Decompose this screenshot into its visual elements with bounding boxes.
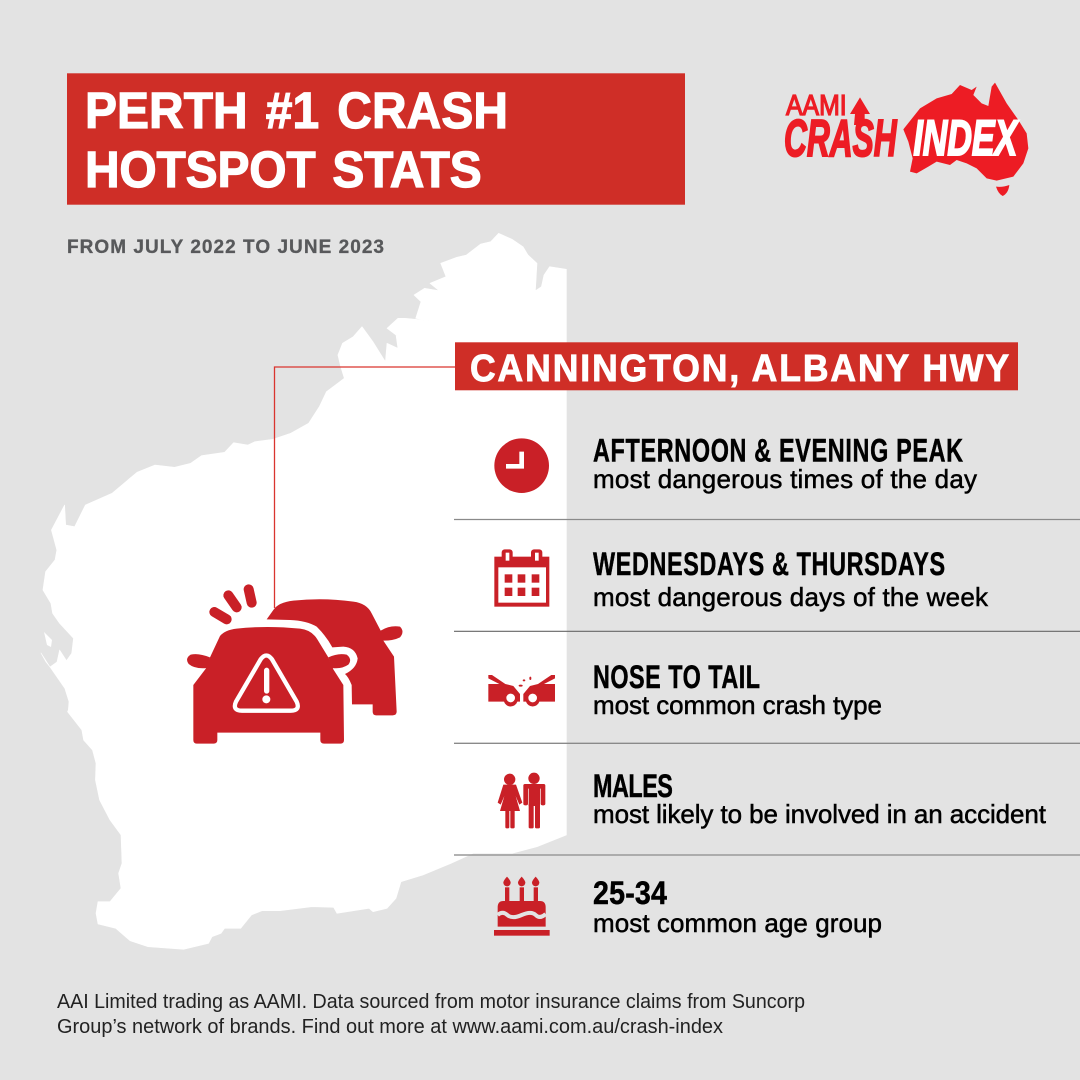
description: gender: most likely to be involved in an accident xyxy=(593,799,1047,829)
icon: birthday cake xyxy=(494,877,550,936)
title banner xyxy=(67,73,685,205)
logo: AAMI Crash Index: AAMI xyxy=(786,90,847,122)
footer source note: Group’s network of brands. Find out more at www.aami.com.au/crash-index xyxy=(57,1015,724,1038)
logo: AAMI Crash Index: INDEX xyxy=(913,110,1019,166)
stat row: gender xyxy=(498,767,1047,829)
title banner: HOTSPOT STATS xyxy=(85,142,482,198)
footer source note xyxy=(57,990,805,1038)
description: days of the week: most dangerous days of the week xyxy=(593,582,989,612)
date range subtitle: FROM JULY 2022 TO JUNE 2023 xyxy=(67,237,384,258)
heading: nose to tail: NOSE TO TAIL xyxy=(593,658,760,695)
icon: calendar xyxy=(494,549,549,607)
description: crash type: most common crash type xyxy=(593,690,882,720)
icon: clock xyxy=(494,438,549,493)
footer source note: AAI Limited trading as AAMI. Data sourced from motor insurance claims from Suncorp xyxy=(57,990,805,1013)
stat row: crash type xyxy=(488,658,882,720)
stat row: time of day xyxy=(494,432,977,494)
description: times of day: most dangerous times of the day xyxy=(593,464,977,494)
heading: 25-34: 25-34 xyxy=(593,875,667,911)
icon: woman and man xyxy=(498,773,545,828)
map: Western Australia xyxy=(41,233,566,949)
heading: afternoon and evening peak: AFTERNOON & EVENING PEAK xyxy=(593,432,964,469)
title banner: PERTH #1 CRASH xyxy=(85,83,508,139)
logo: AAMI Crash Index: CRASH xyxy=(784,110,898,168)
connector line xyxy=(274,367,456,608)
heading: Wednesdays and Thursdays: WEDNESDAYS & THURSDAYS xyxy=(593,545,945,582)
description: age group: most common age group xyxy=(593,908,882,938)
stat row: age group xyxy=(494,875,882,938)
stat row: days of the week xyxy=(494,545,989,612)
heading: males: MALES xyxy=(593,767,673,804)
icon: nose to tail crash xyxy=(488,675,555,707)
icon: crashed cars with warning xyxy=(187,589,402,744)
logo: AAMI Crash Index xyxy=(784,83,1028,196)
location banner: CANNINGTON, ALBANY HWY xyxy=(470,347,1009,389)
